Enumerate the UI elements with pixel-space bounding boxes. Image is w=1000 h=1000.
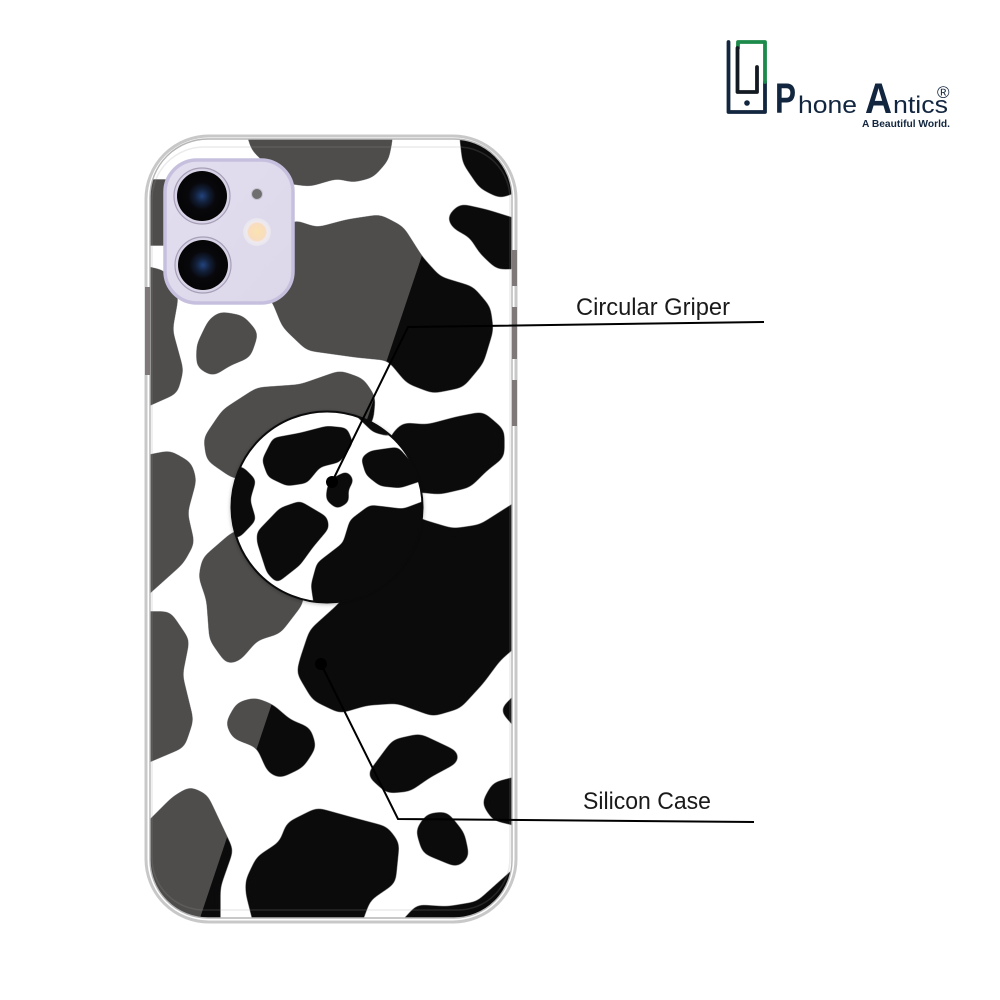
leader line <box>332 322 764 482</box>
label: silicon case: Silicon Case <box>583 788 711 815</box>
bottom lens <box>175 237 231 293</box>
popgrip: circular griper <box>228 410 426 606</box>
side button strips <box>145 250 517 426</box>
logo icon: phone <box>728 42 765 112</box>
inner rim highlight <box>152 147 510 910</box>
cow print pattern <box>150 140 512 918</box>
camera module <box>165 160 293 303</box>
logo wordmark: hone <box>798 92 857 119</box>
logo wordmark: A Beautiful World. <box>862 118 950 130</box>
flash <box>243 218 271 246</box>
case frame backing <box>146 136 516 922</box>
logo wordmark: P <box>775 75 796 123</box>
callout leader: circular griper <box>326 322 764 488</box>
microphone <box>252 188 262 200</box>
leader dot <box>315 658 327 670</box>
top lens <box>174 168 230 224</box>
grip outline <box>232 412 422 602</box>
camera housing <box>165 160 293 303</box>
logo wordmark: ® <box>937 83 950 102</box>
logo wordmark: A <box>865 75 892 123</box>
top-left corner patch <box>174 148 178 150</box>
logo wordmark <box>775 75 950 130</box>
grip shadow <box>231 412 423 604</box>
leader dot <box>326 476 338 488</box>
brand logo <box>728 42 950 130</box>
inner case edge <box>150 139 512 918</box>
label: circular griper: Circular Griper <box>576 294 730 321</box>
glare: lightens black to grey on the left side of the diagonal <box>150 139 461 918</box>
grip disc <box>232 412 422 602</box>
logo icon: dot <box>744 100 750 106</box>
callout leader: silicon case <box>315 658 754 822</box>
logo wordmark: ntics <box>893 92 948 119</box>
leader line <box>321 664 754 822</box>
grip cow pattern <box>232 418 422 602</box>
phone case <box>144 134 518 924</box>
